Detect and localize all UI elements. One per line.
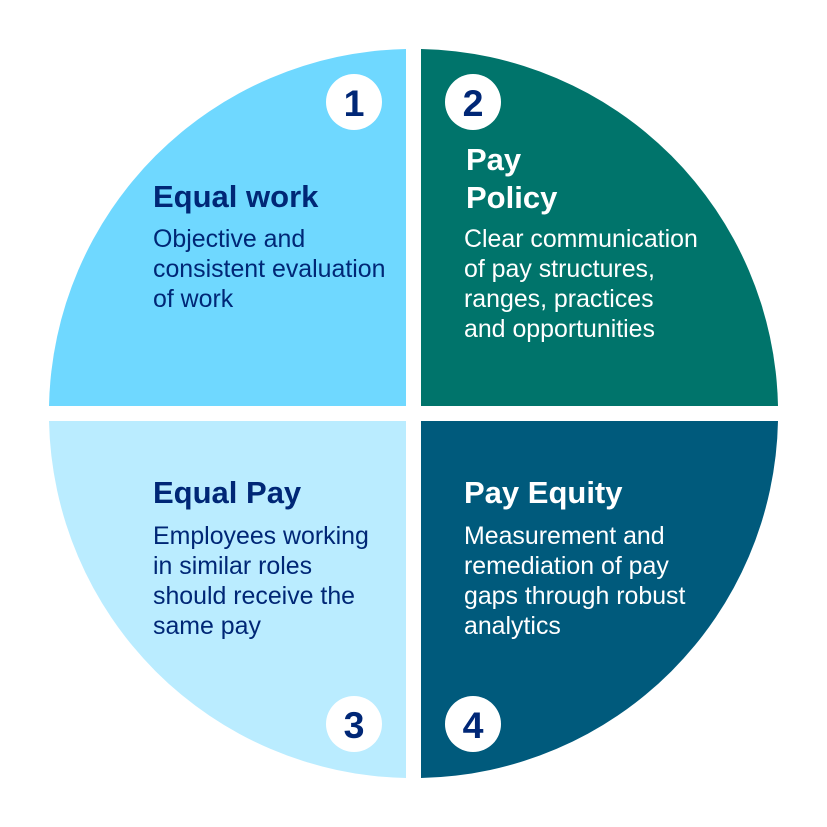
quadrant 1 background	[49, 49, 406, 406]
text block: equal work description: Objective and	[153, 225, 305, 253]
panel: pay policy	[421, 49, 778, 406]
text block: equal pay description: same pay	[153, 612, 261, 640]
heading: pay policy: Pay	[466, 142, 522, 177]
panel: pay equity	[421, 421, 778, 778]
text block: pay policy description: of pay structures,	[464, 255, 655, 283]
text block: pay equity description: Measurement and	[464, 522, 665, 550]
heading: pay equity: Pay Equity	[464, 475, 623, 510]
badge: number 1: 1	[344, 82, 364, 124]
badge: number 4: 4	[463, 704, 484, 746]
text block: pay policy description: and opportunities	[464, 315, 655, 343]
text block: pay policy description: ranges, practices	[464, 285, 654, 313]
badge: number 2: 2	[463, 82, 483, 124]
text block: equal work description: of work	[153, 285, 234, 313]
quadrant 2 background	[421, 49, 778, 406]
text block: pay policy description: Clear communication	[464, 225, 698, 253]
text block: equal pay description: Employees working	[153, 522, 369, 550]
text block: pay equity description: gaps through robust	[464, 582, 685, 610]
badge: number 3	[326, 696, 382, 752]
panel: equal pay	[49, 421, 406, 778]
heading: equal pay: Equal Pay	[153, 475, 302, 510]
heading: pay policy: Policy	[466, 180, 558, 215]
quadrant 3 background	[49, 421, 406, 778]
text block: equal pay description: should receive the	[153, 582, 355, 610]
badge: number 4	[445, 696, 501, 752]
badge: number 3: 3	[344, 704, 364, 746]
text block: equal pay description: in similar roles	[153, 552, 312, 580]
text block: pay equity description: analytics	[464, 612, 561, 640]
heading: equal work: Equal work	[153, 179, 319, 214]
text block: pay equity description: remediation of pay	[464, 552, 669, 580]
badge: number 1	[326, 74, 382, 130]
quadrant 4 background	[421, 421, 778, 778]
text block: equal work description: consistent evaluation	[153, 255, 385, 283]
panel: equal work	[49, 49, 406, 406]
badge: number 2	[445, 74, 501, 130]
